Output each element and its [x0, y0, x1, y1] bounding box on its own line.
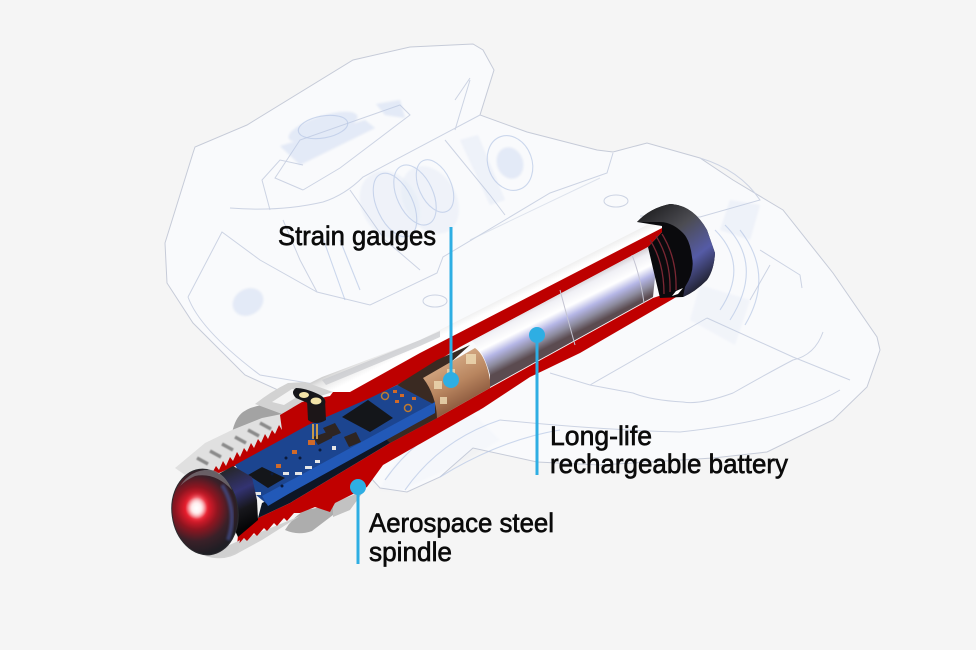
ghost stripe on sleeve — [322, 331, 440, 385]
outer sleeve, upper — [300, 222, 662, 395]
small chip — [248, 467, 285, 488]
callout: spindle: spindle — [369, 537, 452, 567]
callout: spindle: Aerospace steel — [369, 508, 554, 538]
spindle cutaway — [166, 204, 715, 559]
circuit board — [235, 385, 435, 506]
callout: battery: Long-life — [550, 421, 652, 451]
lower threaded nut — [285, 505, 333, 533]
strain gauge copper sleeve — [423, 348, 490, 418]
silver thread, upper — [175, 414, 284, 482]
processor chip — [342, 400, 393, 432]
outer pedal shell — [165, 44, 880, 492]
near cap body — [213, 466, 258, 537]
upper threaded nut — [232, 402, 285, 433]
upper red section — [210, 228, 662, 477]
inner contour lines — [188, 78, 850, 432]
strain gauge pattern — [434, 354, 476, 404]
callout: spindle — [350, 479, 554, 567]
lens with red glow — [166, 465, 244, 559]
lower red section — [237, 288, 685, 546]
spring coil details — [296, 112, 759, 490]
board front edge — [262, 402, 435, 506]
silver thread, lower — [205, 516, 300, 558]
internal spring and axle mechanism — [228, 100, 760, 490]
sensor connector — [293, 388, 326, 439]
silver rim — [190, 540, 240, 557]
callout: strain gauges: Strain gauges — [278, 221, 436, 251]
callout: battery — [529, 327, 788, 479]
battery cylinder — [460, 247, 655, 387]
lower shoulder plate — [333, 488, 366, 517]
brown interior around the gauge — [385, 345, 470, 443]
end cap with inner threads — [637, 204, 715, 298]
thread ridges — [197, 423, 271, 464]
callout: battery: rechargeable battery — [550, 449, 788, 479]
components — [313, 423, 361, 447]
dark cavity under board — [258, 410, 437, 518]
shoulder silver highlight — [255, 382, 333, 414]
pedal body ghosted outline — [165, 44, 880, 492]
callout: strain gauges — [278, 221, 459, 388]
